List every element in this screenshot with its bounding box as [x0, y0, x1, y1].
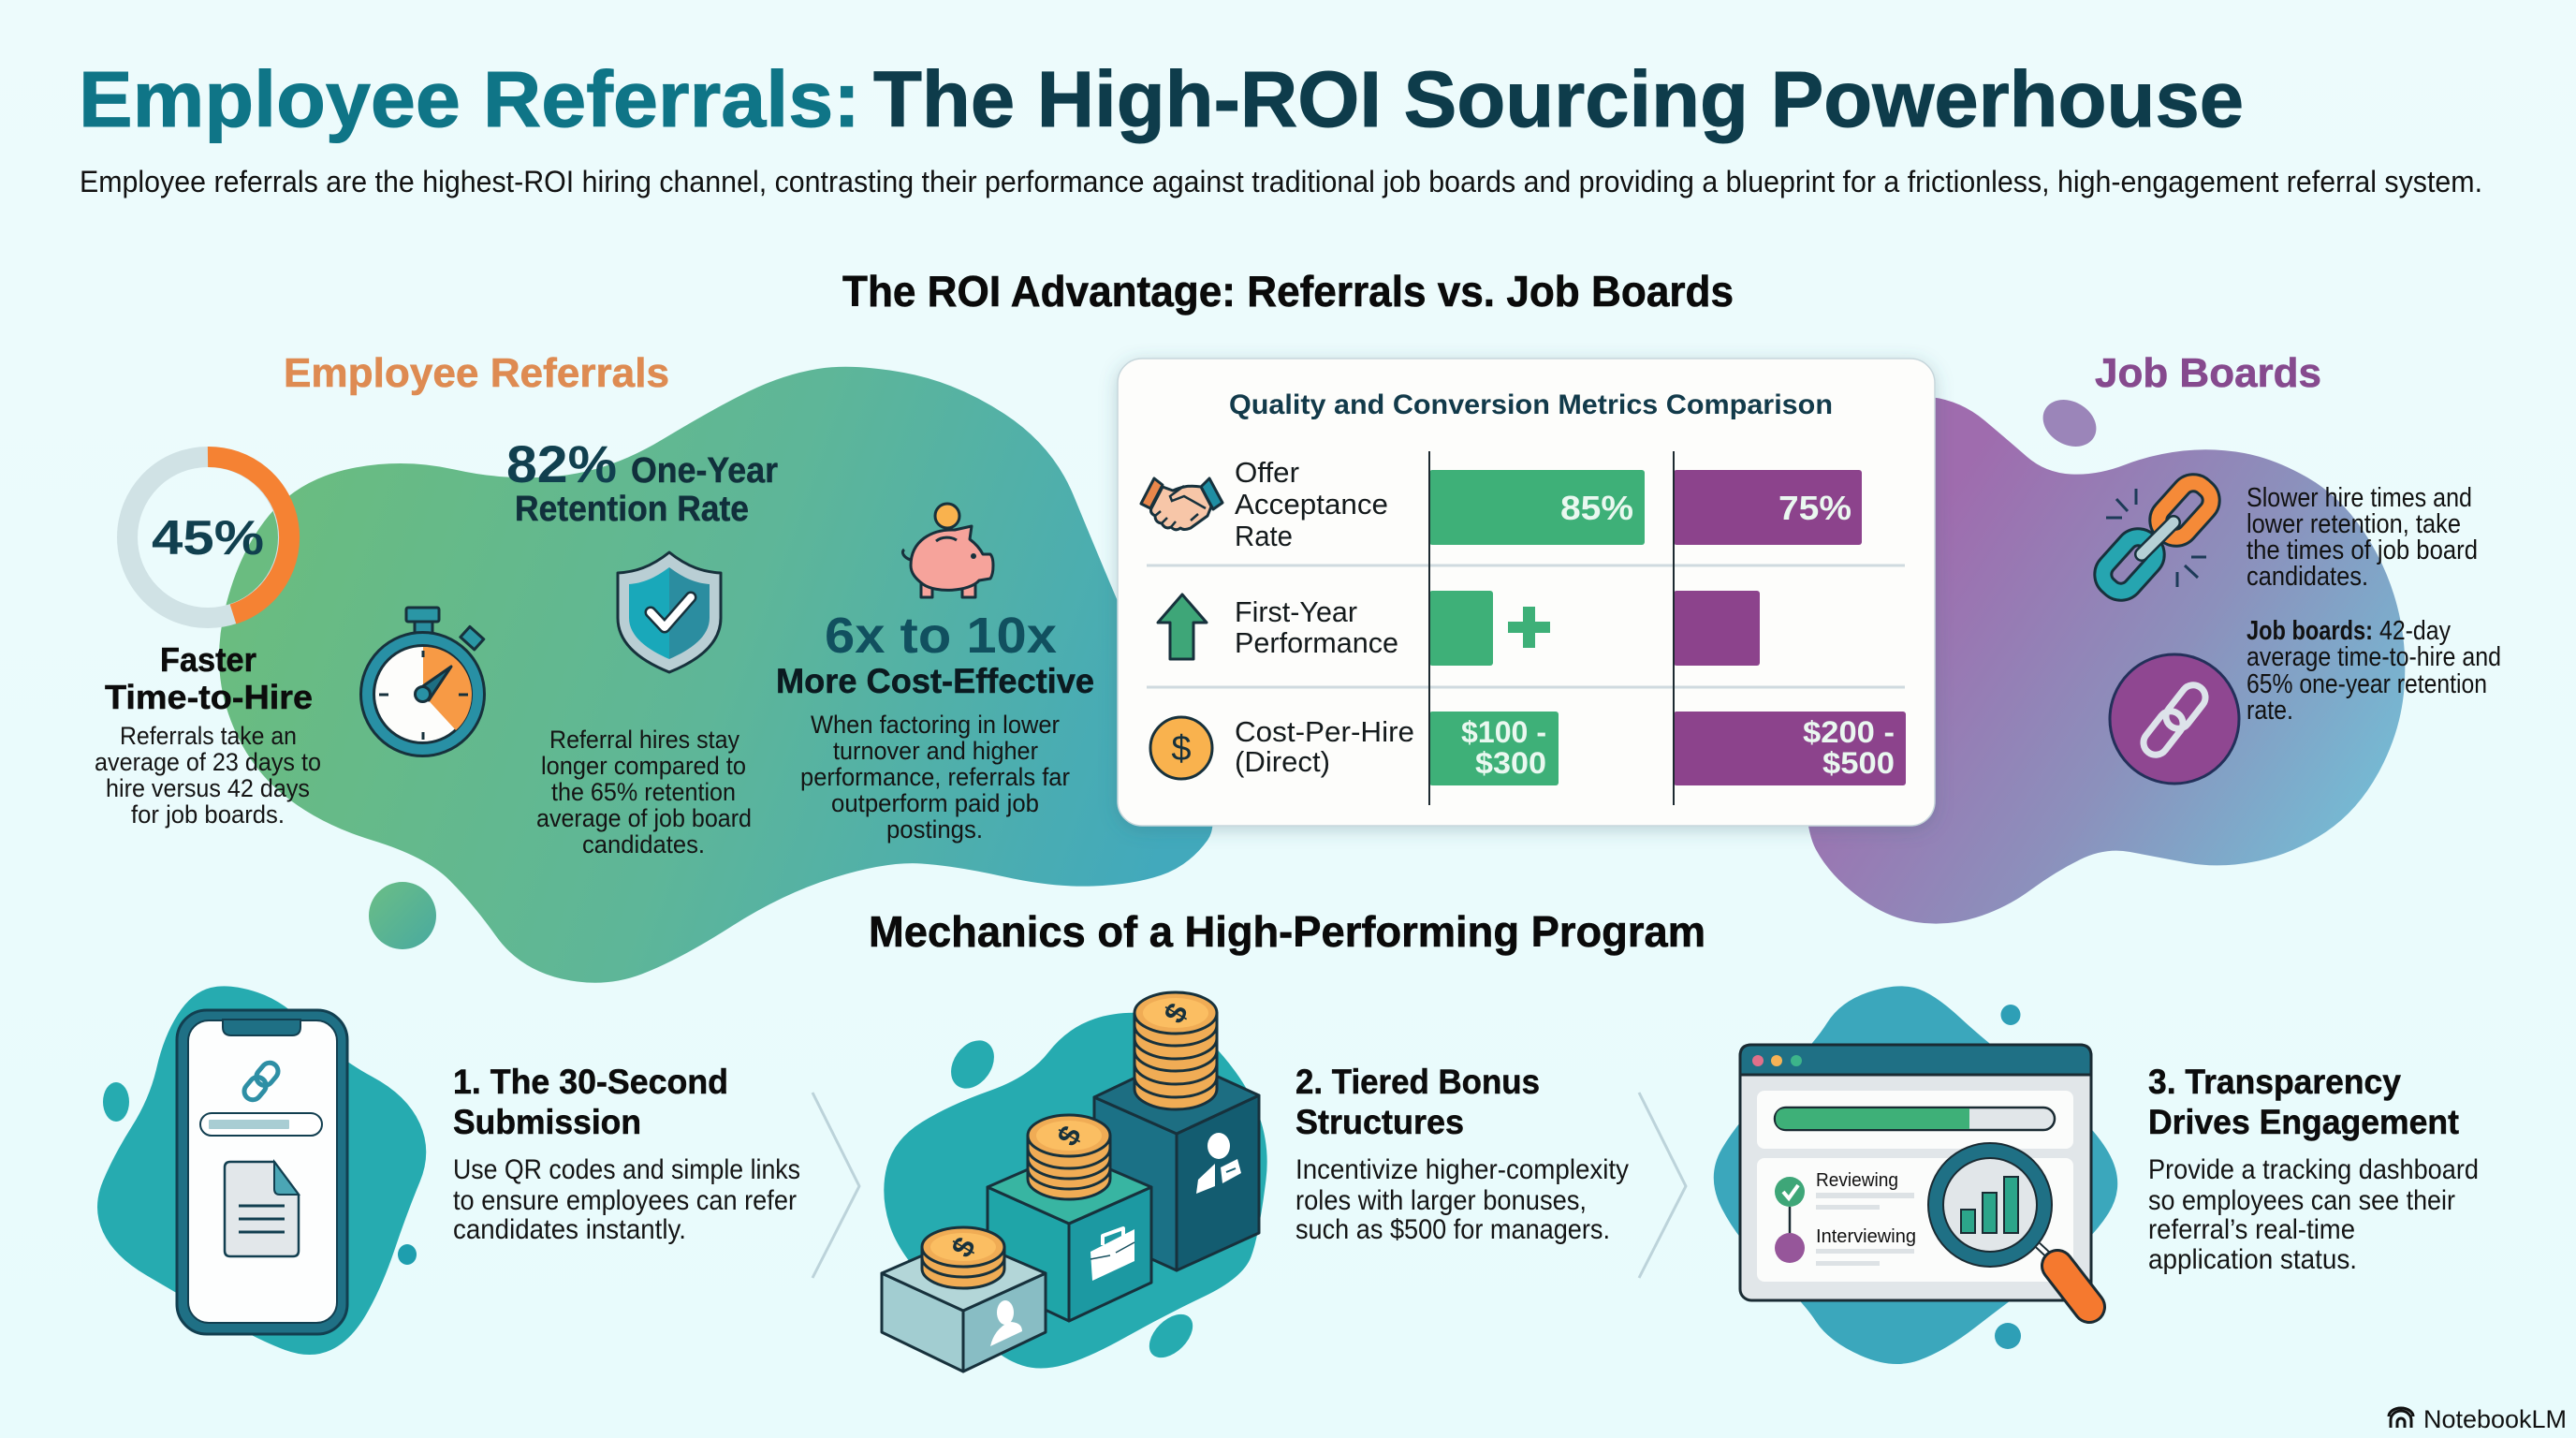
coin stack: tall box: $ [1157, 997, 1194, 1029]
arrow: step 1 to step 2 [812, 1093, 859, 1278]
title: Employee Referrals: [79, 55, 860, 143]
stat description: turnover and higher [833, 737, 1038, 765]
step 2 description: roles with larger bonuses, [1295, 1185, 1587, 1216]
bar: job boards first-year performance [1674, 591, 1760, 666]
heading: mechanics: Mechanics of a High-Performing Program [869, 907, 1705, 956]
stat heading: One-Year [631, 451, 778, 491]
bar: job boards cost [1674, 712, 1906, 785]
coin stack: mid box: $ [1050, 1120, 1088, 1152]
icon: up arrow [1158, 594, 1207, 659]
title [79, 55, 2244, 143]
step 3 description: Provide a tracking dashboard [2148, 1154, 2479, 1185]
text: job boards drawback: lower retention, take [2247, 509, 2461, 539]
mid box with briefcase icon [988, 1152, 1151, 1321]
bar: referrals cost: $100 - [1461, 715, 1546, 749]
bar: job boards 75%: 75% [1778, 489, 1852, 527]
stat description: Referral hires stay [549, 726, 739, 754]
row label: first-year performance: Performance [1235, 626, 1398, 659]
blob: small green dot [369, 882, 436, 949]
status timeline: Reviewing [1816, 1170, 1898, 1191]
text: job boards drawback [2247, 483, 2478, 592]
small box with person icon [882, 1238, 1046, 1372]
stat value: 6x to 10x [825, 608, 1057, 664]
arrow: step 2 to step 3 [1639, 1093, 1686, 1278]
icon: document [225, 1162, 299, 1256]
dashboard window [1740, 1045, 2091, 1300]
icon: handshake [1141, 478, 1222, 530]
blob: step 2 background [884, 1013, 1267, 1369]
stat: 82% retention [506, 434, 778, 858]
stat description: Referrals take an [120, 722, 297, 750]
stat heading: Time-to-Hire [105, 678, 313, 716]
panel: quality and conversion metrics comparison [1118, 359, 1935, 826]
step 2 description [1295, 1154, 1629, 1245]
stat description: When factoring in lower [811, 711, 1060, 739]
donut chart 45% [127, 457, 289, 618]
stat: 45% faster time-to-hire [95, 457, 321, 829]
bar: referrals 85%: 85% [1560, 489, 1633, 527]
blob: step 3 background [1714, 986, 2117, 1364]
icon: stopwatch [361, 608, 485, 756]
stat description [95, 722, 321, 829]
coin stack: small box: $ [944, 1231, 982, 1263]
icon: piggy bank [902, 504, 993, 597]
bar: job boards cost: $500 [1822, 746, 1895, 780]
stat description: hire versus 42 days [106, 774, 310, 802]
text: job boards drawback: the times of job board [2247, 536, 2478, 565]
step 3 heading: 3. Transparency [2148, 1063, 2401, 1101]
stat description: candidates. [582, 830, 705, 858]
row label: first-year performance [1235, 595, 1398, 659]
coin stack: tall box [1134, 992, 1217, 1109]
subtitle: Employee referrals are the highest-ROI hiring channel, contrasting their performance against traditional job boards and providing a blueprint for a frictionless, high-engagement referral system. [80, 165, 2482, 198]
row label: first-year performance: First-Year [1235, 595, 1357, 628]
blob: job boards background [1804, 397, 2405, 924]
status timeline: Interviewing [1816, 1226, 1916, 1247]
panel heading: Quality and Conversion Metrics Comparison [1229, 389, 1833, 420]
text: job boards stats: 42-day [2379, 616, 2451, 646]
coin stack: mid box [1028, 1115, 1110, 1199]
icon: chain link circle [2110, 654, 2239, 784]
row label: cost-per-hire: (Direct) [1235, 745, 1330, 778]
row label: offer acceptance rate: Rate [1235, 520, 1293, 552]
progress bar [1775, 1108, 2055, 1130]
step 3: transparency drives engagement [1714, 986, 2479, 1364]
row label: cost-per-hire: Cost-Per-Hire [1235, 715, 1414, 748]
bar: referrals cost: $300 [1475, 746, 1546, 780]
logo: NotebookLM: NotebookLM [2423, 1405, 2567, 1433]
stat description: average of job board [536, 804, 752, 832]
stat description: outperform paid job [831, 789, 1039, 817]
row label: offer acceptance rate: Offer [1235, 456, 1299, 489]
stat description: performance, referrals far [800, 763, 1070, 791]
stat description: for job boards. [131, 800, 285, 829]
bar: job boards cost: $200 - [1803, 715, 1895, 749]
step 1 description: to ensure employees can refer [453, 1185, 797, 1216]
step 2 description: such as $500 for managers. [1295, 1214, 1610, 1245]
stat heading [105, 640, 313, 716]
text: job boards stats: 65% one-year retention [2247, 669, 2487, 699]
stat: 6x to 10x [776, 504, 1094, 844]
blob: step 1 background [97, 986, 426, 1355]
bar: referrals 85% [1429, 470, 1645, 545]
step 3 description: application status. [2148, 1244, 2357, 1275]
stat description [800, 711, 1070, 844]
row label: cost-per-hire [1235, 715, 1414, 778]
icon: phone [177, 1010, 347, 1334]
step 1 description [453, 1154, 800, 1245]
text: job boards stats [2247, 616, 2501, 726]
text: job boards drawback: candidates. [2247, 562, 2368, 592]
status timeline [1775, 1170, 1916, 1266]
step 3 description: so employees can see their [2148, 1185, 2455, 1216]
stat value: 82% [506, 434, 617, 493]
step 3 heading [2148, 1063, 2459, 1141]
icon: dollar coin: $ [1171, 729, 1192, 769]
icon: broken chain [2097, 477, 2217, 598]
stat description: the 65% retention [551, 778, 736, 806]
donut value: 45% [152, 511, 264, 565]
step 1: 30-second submission [97, 986, 800, 1355]
heading: employee referrals column: Employee Referrals [284, 350, 669, 396]
stat description: average of 23 days to [95, 748, 321, 776]
text: job boards drawback: Slower hire times and [2247, 483, 2472, 513]
step 1 description: Use QR codes and simple links [453, 1154, 800, 1185]
icon: shield [618, 552, 721, 672]
stat description: longer compared to [541, 752, 746, 780]
coin stack: small box [922, 1227, 1004, 1288]
tall box with manager icon [1094, 1058, 1259, 1270]
heading: ROI advantage: The ROI Advantage: Referrals vs. Job Boards [842, 267, 1734, 315]
text: job boards stats: average time-to-hire and [2247, 642, 2501, 672]
blob: small purple dot [2035, 390, 2104, 456]
title: The High-ROI Sourcing Powerhouse [873, 55, 2244, 143]
step 2: tiered bonus structures [882, 992, 1629, 1372]
step 1 heading [453, 1063, 728, 1141]
step 1 heading: Submission [453, 1103, 641, 1141]
icon: link [241, 1060, 282, 1103]
stat description: postings. [886, 815, 983, 844]
step 3 heading: Drives Engagement [2148, 1103, 2459, 1141]
row label: offer acceptance rate: Acceptance [1235, 488, 1388, 521]
step 1 description: candidates instantly. [453, 1214, 686, 1245]
bar: job boards 75% [1674, 470, 1862, 545]
icon: magnifying glass with chart [1928, 1143, 2089, 1307]
heading: job boards column: Job Boards [2095, 350, 2321, 396]
step 2 heading: 2. Tiered Bonus [1295, 1063, 1540, 1101]
stat description [536, 726, 752, 858]
row label: offer acceptance rate [1235, 456, 1388, 552]
icon: dollar coin [1150, 717, 1212, 779]
text: job boards stats: Job boards: [2247, 616, 2373, 646]
stat heading [515, 451, 778, 529]
blob: employee referrals background [219, 367, 1213, 983]
step 2 description: Incentivize higher-complexity [1295, 1154, 1629, 1185]
step 1 heading: 1. The 30-Second [453, 1063, 728, 1101]
step 2 heading [1295, 1063, 1540, 1141]
step 2 heading: Structures [1295, 1103, 1464, 1141]
step 3 description [2148, 1154, 2479, 1275]
step 3 description: referral’s real-time [2148, 1214, 2355, 1245]
stat heading: Retention Rate [515, 490, 749, 529]
bar: referrals first-year performance [1429, 591, 1550, 666]
stat heading: More Cost-Effective [776, 662, 1094, 700]
stat heading: Faster [160, 640, 256, 679]
text: job boards stats: rate. [2247, 696, 2293, 726]
form field [200, 1113, 322, 1136]
bar: referrals cost [1429, 712, 1559, 785]
